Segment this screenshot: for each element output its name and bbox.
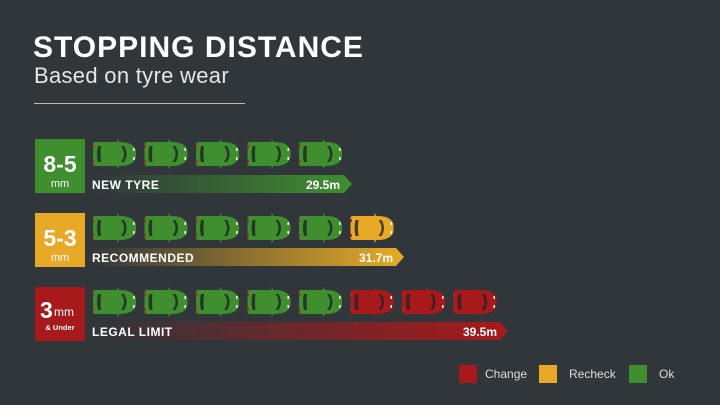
badge: 5-3 mm: 5-3	[43, 225, 77, 251]
row: new tyre	[35, 139, 352, 193]
legend	[459, 365, 675, 383]
bar: 31.7m: 31.7m	[359, 251, 393, 265]
cars	[93, 213, 394, 243]
legend: Change	[485, 367, 527, 381]
subtitle: Based on tyre wear	[34, 63, 229, 88]
bar: 31.7m: RECOMMENDED	[92, 251, 194, 265]
badge: 5-3 mm: mm	[51, 252, 69, 264]
badge: 3mm & under	[35, 287, 85, 341]
bar: 39.5m: 39.5m	[463, 325, 497, 339]
legend: Ok	[659, 367, 675, 381]
bar: 31.7m	[90, 248, 404, 266]
cars	[93, 287, 496, 317]
badge: 5-3 mm	[35, 213, 85, 267]
row: recommended	[35, 213, 404, 267]
badge: 8-5 mm: mm	[51, 178, 69, 190]
badge: 8-5 mm: 8-5	[43, 151, 77, 177]
badge: 8-5 mm	[35, 139, 85, 193]
bar: 29.5m: NEW TYRE	[92, 178, 159, 192]
badge: 3mm & under: mm	[54, 305, 74, 319]
bar: 39.5m: LEGAL LIMIT	[92, 325, 173, 339]
badge: 3mm & under: 3	[40, 297, 53, 323]
title: STOPPING DISTANCE	[33, 31, 364, 64]
bar: 29.5m	[90, 175, 352, 193]
bar: 29.5m: 29.5m	[306, 178, 340, 192]
legend: Recheck	[569, 367, 617, 381]
badge: 3mm & under: & Under	[45, 323, 75, 332]
bar: 39.5m	[90, 322, 508, 340]
row: legal limit	[35, 287, 508, 341]
cars	[93, 139, 342, 169]
